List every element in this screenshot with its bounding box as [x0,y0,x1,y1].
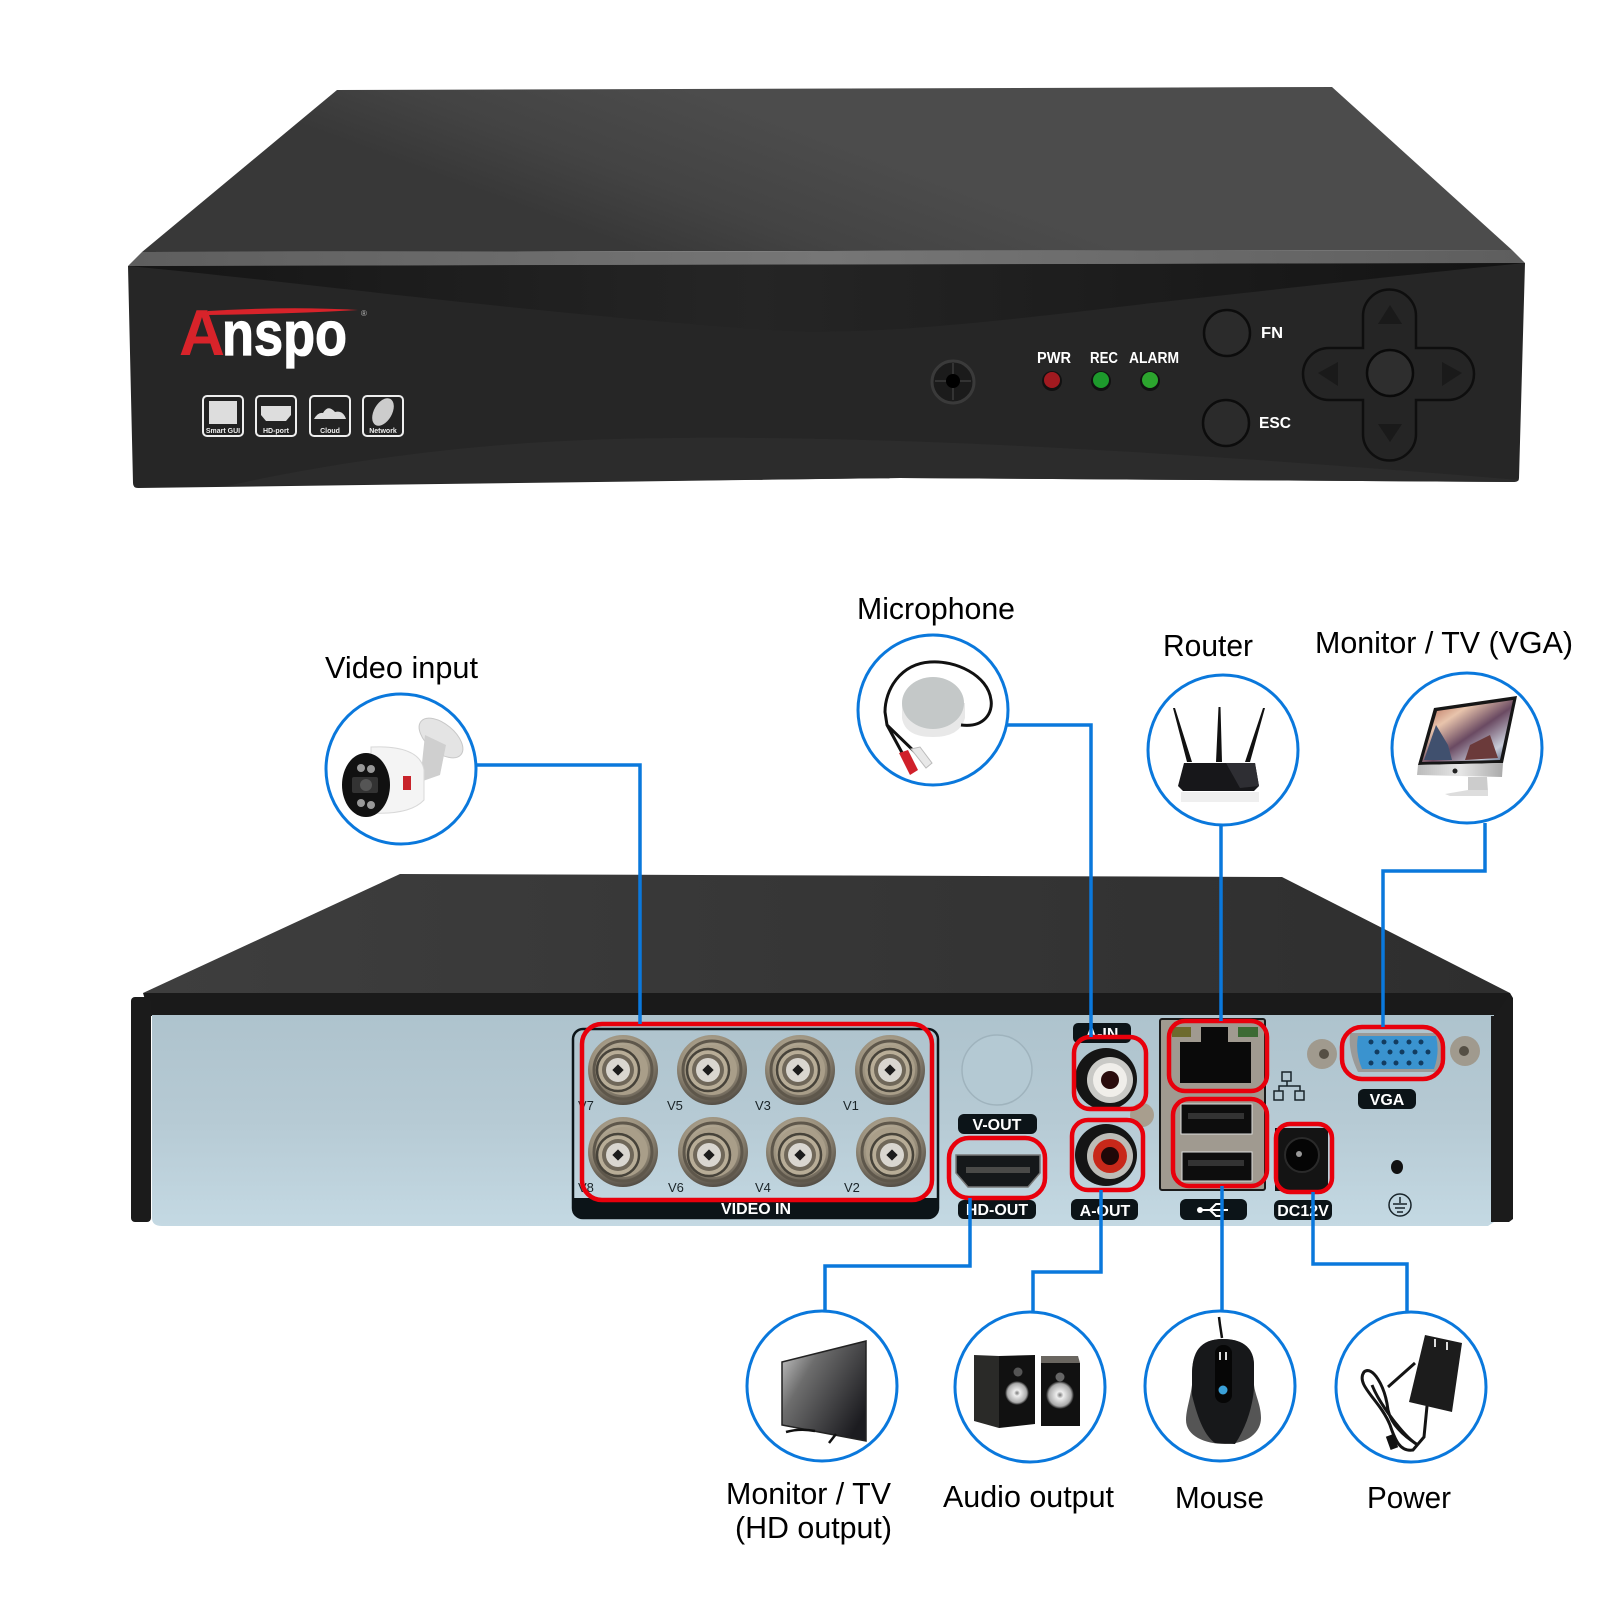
device: mouse: Mouse [1175,1480,1264,1515]
HDMI port [956,1155,1040,1219]
VGA port [1307,1033,1480,1109]
device: mouse [1145,1311,1295,1515]
device: VGA monitor [1315,625,1573,823]
DC power jack: DC12V [1277,1203,1329,1220]
feature badges: HD-port [263,428,290,435]
V-OUT knockout and label: V-OUT [973,1117,1022,1134]
VGA port: VGA [1370,1092,1405,1109]
Anspo logo: nspo [222,300,347,369]
FN and ESC buttons: FN [1261,325,1283,342]
device: microphone: Microphone [857,591,1015,626]
device: HD monitor: Monitor / TV [726,1476,891,1511]
video input connector block: V7 [578,1098,594,1113]
feature badges: Smart GUI [206,428,240,435]
audio ports [1071,1023,1154,1220]
device: power adapter [1336,1312,1486,1515]
DVR front panel [128,263,1525,488]
video input connector block: V4 [755,1180,771,1195]
device: router: Router [1163,628,1253,663]
feature badges: Cloud [320,428,340,435]
status LEDs [1037,350,1179,391]
V-OUT knockout and label [958,1035,1037,1134]
video input connector block [572,1029,938,1218]
device: video input camera [325,650,478,844]
audio ports: A-OUT [1080,1203,1131,1220]
rear panel [152,1015,1494,1226]
feature badges: Network [369,428,397,435]
status LEDs: PWR [1037,350,1071,367]
FN and ESC buttons: ESC [1259,415,1291,432]
microphone hole [932,361,974,403]
device: HD monitor [726,1311,897,1545]
device: audio speakers [943,1312,1114,1514]
device: HD monitor: (HD output) [735,1510,892,1545]
DC power jack [1274,1128,1332,1220]
chassis lid [143,874,1510,993]
device: microphone [857,591,1015,785]
Anspo logo: A [179,296,225,369]
device: VGA monitor: Monitor / TV (VGA) [1315,625,1573,660]
connector lines [476,725,1485,1312]
DVR lid [142,87,1512,252]
status LEDs: ALARM [1129,350,1179,367]
top DVR: front view [128,87,1525,488]
video input connector block: V8 [578,1180,594,1195]
directional pad [1303,290,1474,461]
device: power adapter: Power [1367,1480,1451,1515]
video input connector block: V3 [755,1098,771,1113]
HDMI port: HD-OUT [966,1202,1028,1219]
feature badges [203,395,403,436]
red highlight boxes [582,1021,1443,1200]
video input connector block: VIDEO IN [721,1201,791,1218]
device: audio speakers: Audio output [943,1479,1114,1514]
device: video input camera: Video input [325,650,478,685]
network symbol [1274,1072,1304,1100]
video input connector block: V2 [844,1180,860,1195]
status LEDs: REC [1090,350,1118,367]
bottom DVR: rear view [131,874,1513,1226]
ground symbol [1389,1160,1411,1216]
video input connector block: V5 [667,1098,683,1113]
LAN and USB ports [1160,1019,1265,1220]
FN and ESC buttons [1203,310,1291,446]
device: router [1148,628,1298,825]
audio ports: A-IN [1086,1026,1118,1043]
video input connector block: V6 [668,1180,684,1195]
Anspo logo: ® [361,309,367,318]
video input connector block: V1 [843,1098,859,1113]
